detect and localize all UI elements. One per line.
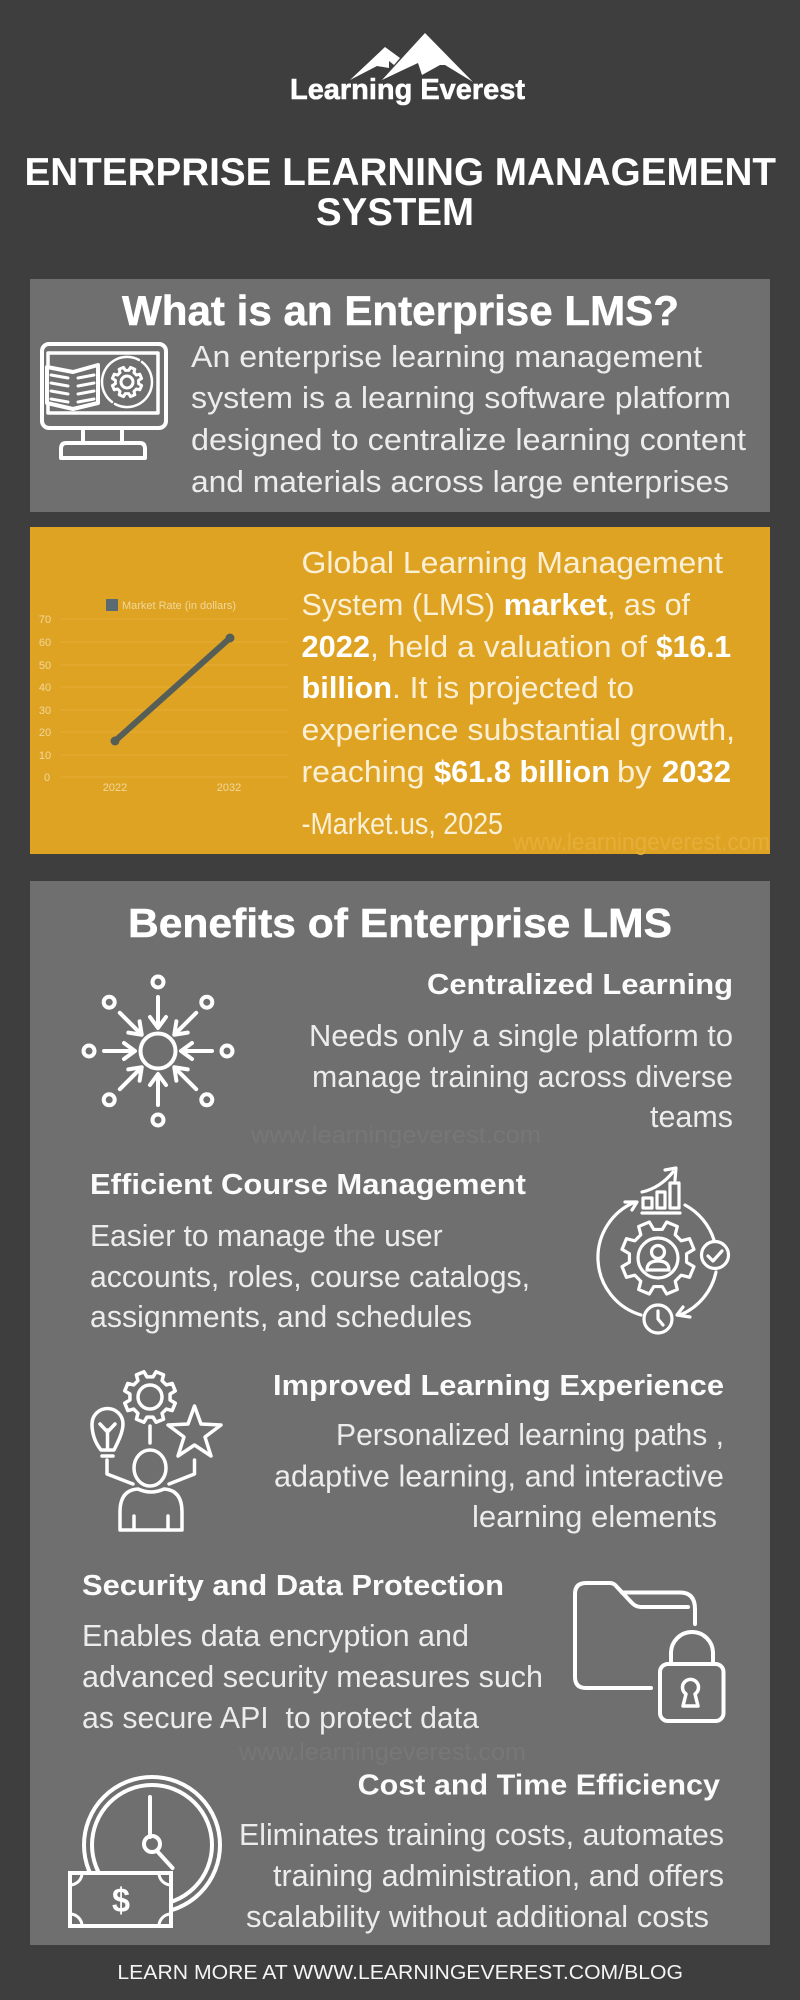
text block: market statistic: by [617, 755, 652, 789]
benefit text: training administration, and offers [273, 1859, 724, 1893]
text block: market statistic: Global Learning Management [302, 546, 724, 580]
benefit text: manage training across diverse [312, 1060, 733, 1094]
text block: market statistic: -Market.us, 2025 [302, 807, 503, 841]
y axis labels: 20 [39, 727, 51, 739]
watermark: www.learningeverest.com [238, 1739, 526, 1766]
text block: market statistic: market [504, 588, 607, 622]
benefit heading: Efficient Course Management [90, 1169, 526, 1201]
benefit: security and data protection [82, 1570, 724, 1735]
benefit text: as secure API to protect data [82, 1701, 479, 1735]
benefit: centralized learning [84, 969, 733, 1134]
benefit text: Enables data encryption and [82, 1619, 469, 1653]
watermark: www.learningeverest.com [250, 1122, 541, 1149]
icon: monitor with book and gear [42, 344, 166, 458]
benefit text: advanced security measures such [82, 1660, 543, 1694]
benefit text [274, 1418, 724, 1534]
benefit: efficient course management [90, 1168, 728, 1334]
benefit text: Eliminates training costs, automates [239, 1818, 724, 1852]
text block: LMS definition [191, 340, 747, 499]
panel: what is an enterprise LMS [30, 279, 770, 512]
x axis labels [103, 782, 241, 794]
benefit text [309, 1019, 733, 1134]
y axis labels [39, 614, 51, 784]
title: SYSTEM [316, 191, 474, 234]
y axis labels: 30 [39, 705, 51, 717]
text block: LMS definition: and materials across large enterprises [191, 465, 729, 499]
logo wordmark: Learning Everest [290, 74, 525, 106]
benefit heading: Improved Learning Experience [273, 1370, 724, 1402]
icon: gear, person and cycle [598, 1168, 728, 1333]
chart line [111, 634, 234, 745]
benefit text [82, 1619, 543, 1735]
benefit text: teams [650, 1100, 733, 1134]
benefit text: learning elements [472, 1500, 717, 1534]
benefit heading: Centralized Learning [427, 969, 733, 1001]
y axis labels: 0 [44, 772, 50, 784]
icon: dollar sign: $ [112, 1882, 130, 1920]
watermark: www.learningeverest.com [512, 829, 770, 856]
text block: market statistic: billion [302, 671, 392, 705]
benefit: improved learning experience [92, 1363, 724, 1534]
benefit text: Personalized learning paths , [336, 1418, 724, 1452]
heading: what is an enterprise LMS: What is an Enterprise LMS? [122, 287, 679, 334]
y axis labels: 40 [39, 682, 51, 694]
text block: LMS definition: system is a learning software platform [191, 381, 731, 415]
benefit text: assignments, and schedules [90, 1300, 472, 1334]
logo: Learning Everest [290, 33, 525, 106]
benefit: cost and time efficiency [70, 1770, 724, 1934]
benefit text: adaptive learning, and interactive [274, 1460, 724, 1494]
benefit text: scalability without additional costs [246, 1900, 709, 1934]
y axis labels: 70 [39, 614, 51, 626]
text block: market statistic: experience substantial growth, [302, 713, 735, 747]
text block: LMS definition: designed to centralize learning content [191, 423, 747, 457]
text block: market statistic: $16.1 [656, 630, 731, 664]
benefit text [90, 1219, 530, 1334]
icon: person with gear, bulb and star [92, 1363, 221, 1530]
icon: clock with banknote [70, 1777, 220, 1926]
text block: market statistic: 2032 [662, 755, 731, 789]
benefit heading: Cost and Time Efficiency [358, 1770, 720, 1802]
icon: mountain peaks [350, 33, 473, 82]
y axis labels: 60 [39, 637, 51, 649]
x axis labels: 2032 [217, 782, 241, 794]
text block: market statistic: . It is projected to [392, 671, 634, 705]
icon: arrows converging on centre [84, 976, 232, 1126]
heading: benefits: Benefits of Enterprise LMS [128, 900, 672, 946]
x axis labels: 2022 [103, 782, 127, 794]
panel: benefits of enterprise LMS [30, 881, 770, 1945]
text block: market statistic: , held a valuation of [370, 630, 648, 664]
benefit heading: Security and Data Protection [82, 1570, 504, 1602]
line chart: market rate [39, 599, 288, 794]
icon: folder with padlock [575, 1583, 724, 1721]
chart legend: Market Rate (in dollars) [122, 600, 236, 612]
text block: market statistic: $61.8 billion [434, 755, 610, 789]
title: ENTERPRISE LEARNING MANAGEMENT [24, 151, 776, 194]
y axis labels: 10 [39, 750, 51, 762]
text block: market statistic: , as of [607, 588, 691, 622]
text block: market statistic: System (LMS) [302, 588, 495, 622]
footer: LEARN MORE AT WWW.LEARNINGEVEREST.COM/BLOG [117, 1962, 683, 1984]
text block: LMS definition: An enterprise learning management [191, 340, 703, 374]
benefit text: accounts, roles, course catalogs, [90, 1260, 530, 1294]
benefit text [239, 1818, 724, 1934]
text block: market statistic [302, 546, 735, 841]
y axis labels: 50 [39, 660, 51, 672]
benefit text: Needs only a single platform to [309, 1019, 733, 1053]
panel: market statistic [30, 527, 770, 856]
title [24, 151, 776, 234]
text block: market statistic: 2022 [302, 630, 370, 664]
text block: market statistic: reaching [302, 755, 424, 789]
benefit text: Easier to manage the user [90, 1219, 443, 1253]
